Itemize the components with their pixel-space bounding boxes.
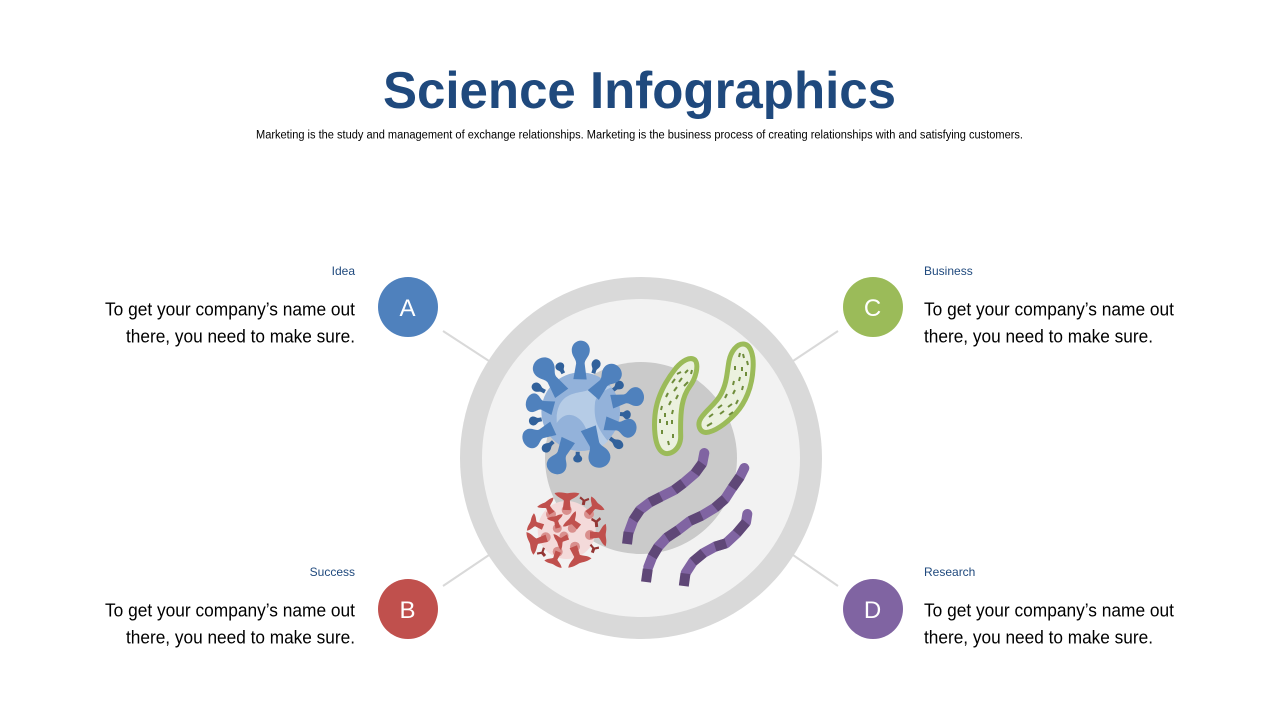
badge C <box>843 277 903 337</box>
text block A <box>105 300 355 346</box>
label: success: Success <box>310 565 355 579</box>
badge A <box>378 277 438 337</box>
badge D: D <box>864 597 881 624</box>
text block D <box>924 600 1174 648</box>
text block B <box>105 600 355 648</box>
icon: green bacterium right <box>699 344 753 432</box>
badge D <box>843 579 903 639</box>
chain three <box>684 514 747 586</box>
text block C: there, you need to make sure. <box>924 326 1153 346</box>
panel: D research <box>843 565 1174 648</box>
panel: A idea <box>105 264 438 346</box>
text block D: To get your company’s name out <box>924 600 1174 620</box>
label: research: Research <box>924 565 975 579</box>
text block B: there, you need to make sure. <box>126 628 355 648</box>
icon: blue virus <box>519 340 646 478</box>
text block D: there, you need to make sure. <box>924 628 1153 648</box>
chain two <box>646 468 744 582</box>
label: business: Business <box>924 264 973 278</box>
badge A: A <box>399 295 416 322</box>
text block C: To get your company’s name out <box>924 300 1174 320</box>
panel: C business <box>843 264 1174 346</box>
panel: B success <box>105 565 438 648</box>
label: idea: Idea <box>332 264 355 278</box>
text block C <box>924 300 1174 346</box>
subtitle: Marketing is the study and management of exchange relationships. Marketing is the business process of creating relationships with and satisfying customers. <box>256 130 1023 142</box>
text block B: To get your company’s name out <box>105 600 355 620</box>
title: Science Infographics <box>383 62 896 120</box>
icon: purple chain bacteria <box>627 453 747 586</box>
connector lines <box>443 331 838 586</box>
petri dish <box>460 277 822 639</box>
icon: red virus <box>526 492 606 568</box>
badge B <box>378 579 438 639</box>
badge B: B <box>399 597 416 624</box>
badge C: C <box>864 295 881 322</box>
text block A: there, you need to make sure. <box>126 326 355 346</box>
chain one <box>627 453 704 544</box>
text block A: To get your company’s name out <box>105 300 355 320</box>
icon: green bacterium left <box>655 359 697 454</box>
